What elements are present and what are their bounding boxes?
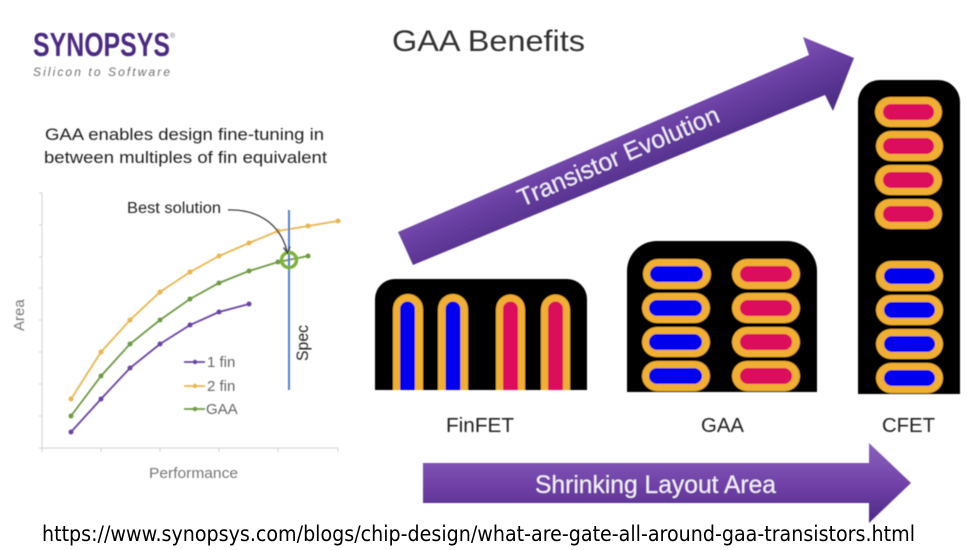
chart heading: between multiples of fin equivalent (44, 148, 327, 167)
label: CFET: CFET (882, 415, 935, 437)
logo: Synopsys (33, 26, 176, 79)
arrow: transistor evolution (398, 37, 854, 265)
arrow: best solution pointer (228, 210, 290, 253)
label: GAA: GAA (701, 415, 745, 437)
series: GAA (68, 254, 310, 418)
chart legend: 1 fin (207, 354, 235, 371)
arrow label: Shrinking Layout Area (535, 471, 776, 499)
series: 1 fin (68, 302, 252, 434)
source URL: https://www.synopsys.com/blogs/chip-design/what-are-gate-all-around-gaa-transistors.html (42, 522, 915, 546)
device: FinFET (375, 279, 587, 390)
device: CFET (858, 80, 960, 394)
chart legend: GAA (206, 401, 238, 418)
best solution marker (282, 252, 296, 268)
arrow: shrinking layout area (423, 443, 911, 523)
axis label: Area: Area (11, 299, 28, 331)
chart heading: GAA enables design fine-tuning in (45, 125, 324, 144)
axis label: Performance: Performance (149, 465, 238, 482)
spec line (288, 210, 290, 390)
spec label: Spec (294, 325, 312, 361)
best solution label: Best solution (127, 200, 221, 217)
line chart: area vs performance (11, 193, 340, 482)
chart axes (39, 193, 338, 452)
series: 2 fin (68, 218, 340, 402)
chart heading (44, 125, 327, 167)
logo: Synopsys: ® (170, 32, 176, 40)
label: FinFET: FinFET (446, 415, 514, 437)
logo: Synopsys: Silicon to Software (33, 65, 170, 79)
title: GAA Benefits (392, 25, 585, 58)
chart legend: 2 fin (207, 378, 235, 395)
arrow label: Transistor Evolution (513, 101, 724, 213)
logo: Synopsys: SYNOPSYS (33, 26, 170, 63)
chart legend (184, 354, 238, 418)
device: GAA (627, 241, 817, 392)
